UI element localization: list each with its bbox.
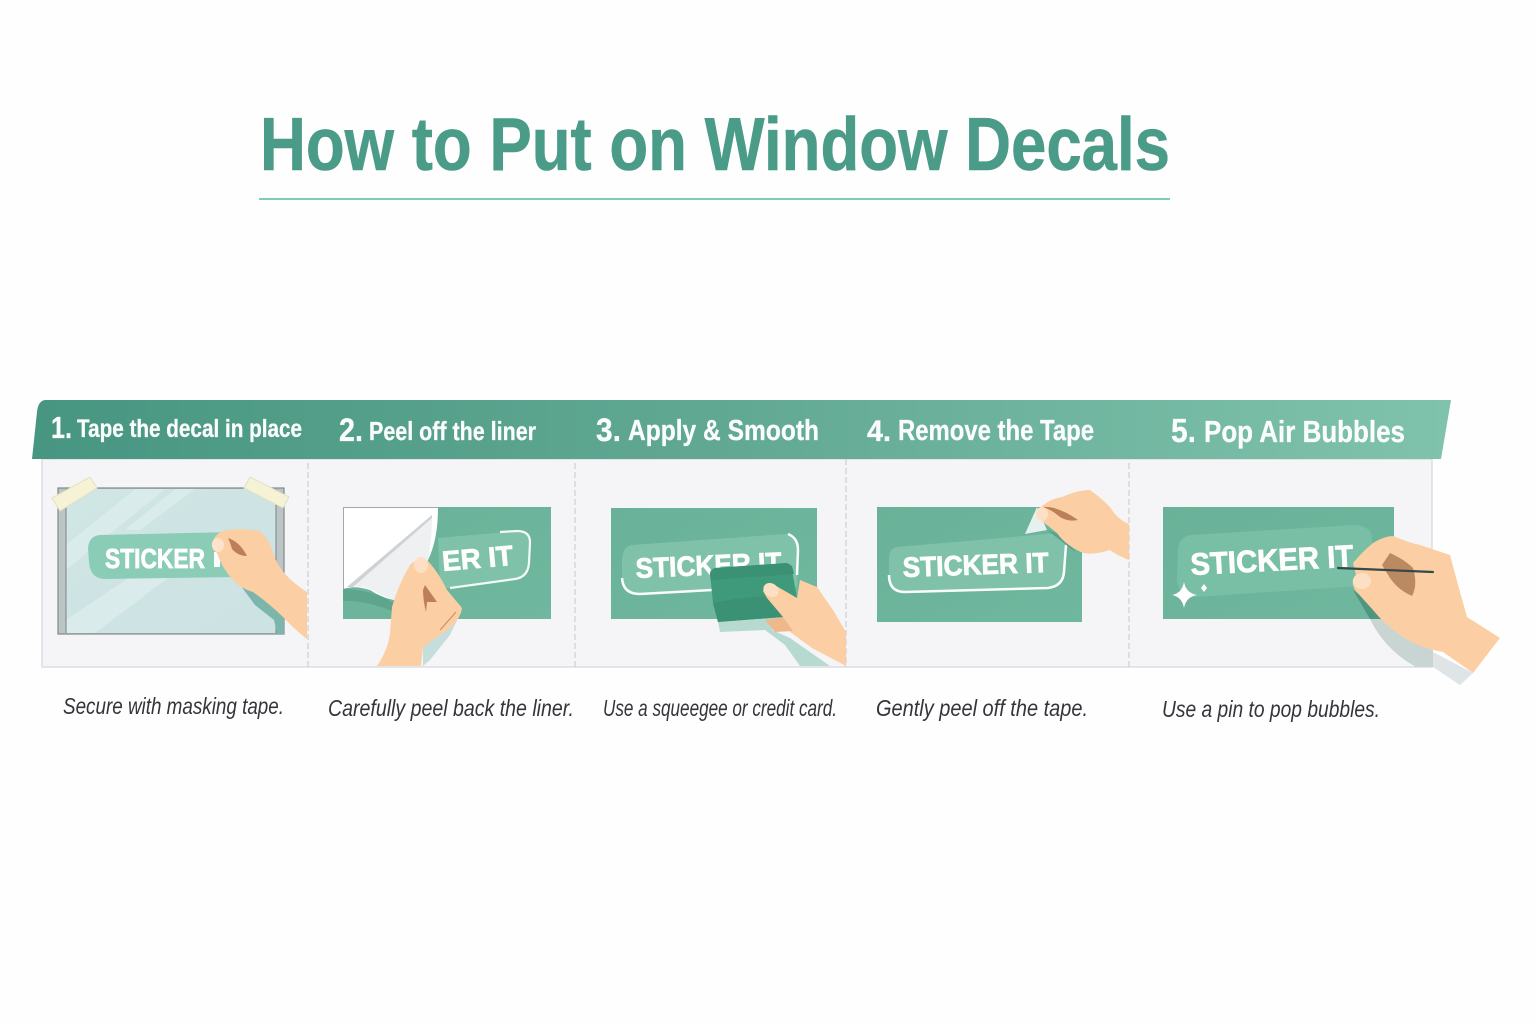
decal label (622, 534, 798, 594)
heading: step 2: Peel off the liner (369, 416, 536, 446)
decal label (1177, 525, 1372, 597)
hand (1036, 490, 1129, 560)
hand (212, 529, 307, 639)
tape left (52, 477, 97, 511)
decal card (611, 508, 817, 619)
decal text: STICKER (105, 543, 205, 574)
heading: step 5: 5. (1171, 412, 1196, 449)
heading: step 3: Apply & Smooth (628, 415, 819, 447)
sparkle small (1201, 584, 1207, 592)
decal text: ER IT (441, 540, 514, 577)
caption: step 2: Carefully peel back the liner. (328, 695, 574, 721)
squeegee (710, 563, 797, 622)
heading: step 1: Tape the decal in place (77, 415, 302, 443)
hand shadow (1047, 530, 1075, 552)
illustration: step 4 remove the tape (877, 490, 1129, 622)
illustration: step 3 apply and smooth (611, 508, 846, 666)
tape corner (1025, 507, 1047, 534)
decal card (1163, 507, 1394, 619)
window pane (58, 488, 284, 634)
sleeve (1433, 652, 1473, 685)
caption: step 3: Use a squeegee or credit card. (603, 695, 837, 721)
decal text: STICKER IT (1190, 539, 1354, 582)
hand shadow (238, 582, 284, 634)
decal label (889, 533, 1066, 592)
heading: step 1: 1. (51, 410, 72, 445)
decal text: STICKER IT (902, 547, 1049, 583)
caption: step 4: Gently peel off the tape. (876, 695, 1088, 721)
heading: step 1 (51, 410, 302, 445)
banner: step headings (32, 400, 1451, 459)
panel: illustration strip background (42, 459, 1432, 667)
pin (1338, 568, 1433, 572)
title: How to Put on Window Decals (260, 102, 1170, 186)
illustration: step 5 pop air bubbles (1163, 507, 1500, 685)
tape right (244, 477, 289, 508)
hand shadow (423, 612, 461, 666)
heading: step 2 (339, 412, 536, 448)
heading: step 2: 2. (339, 412, 363, 448)
caption: step 5: Use a pin to pop bubbles. (1162, 696, 1380, 722)
squeegee shadow (718, 617, 830, 666)
hand (761, 580, 846, 666)
heading: step 4: Remove the Tape (898, 415, 1094, 447)
heading: step 3: 3. (596, 412, 621, 448)
heading: step 4: 4. (867, 415, 891, 448)
decal card (877, 507, 1082, 622)
illustration: step 1 tape the decal (52, 477, 307, 639)
decal label (438, 531, 530, 588)
hand shadow (1353, 590, 1433, 667)
liner (343, 507, 438, 601)
decal card (343, 507, 551, 619)
decal (88, 532, 236, 579)
hand (377, 557, 462, 666)
letter stub (214, 552, 220, 567)
decal text: STICKER IT (635, 547, 782, 584)
caption: step 1: Secure with masking tape. (63, 693, 284, 719)
illustration: step 2 peel liner (343, 507, 551, 666)
curl shadow (343, 589, 395, 612)
sparkle large (1172, 582, 1197, 608)
hand (1353, 536, 1500, 673)
heading: step 3 (596, 412, 819, 448)
heading: step 5: Pop Air Bubbles (1204, 414, 1405, 449)
